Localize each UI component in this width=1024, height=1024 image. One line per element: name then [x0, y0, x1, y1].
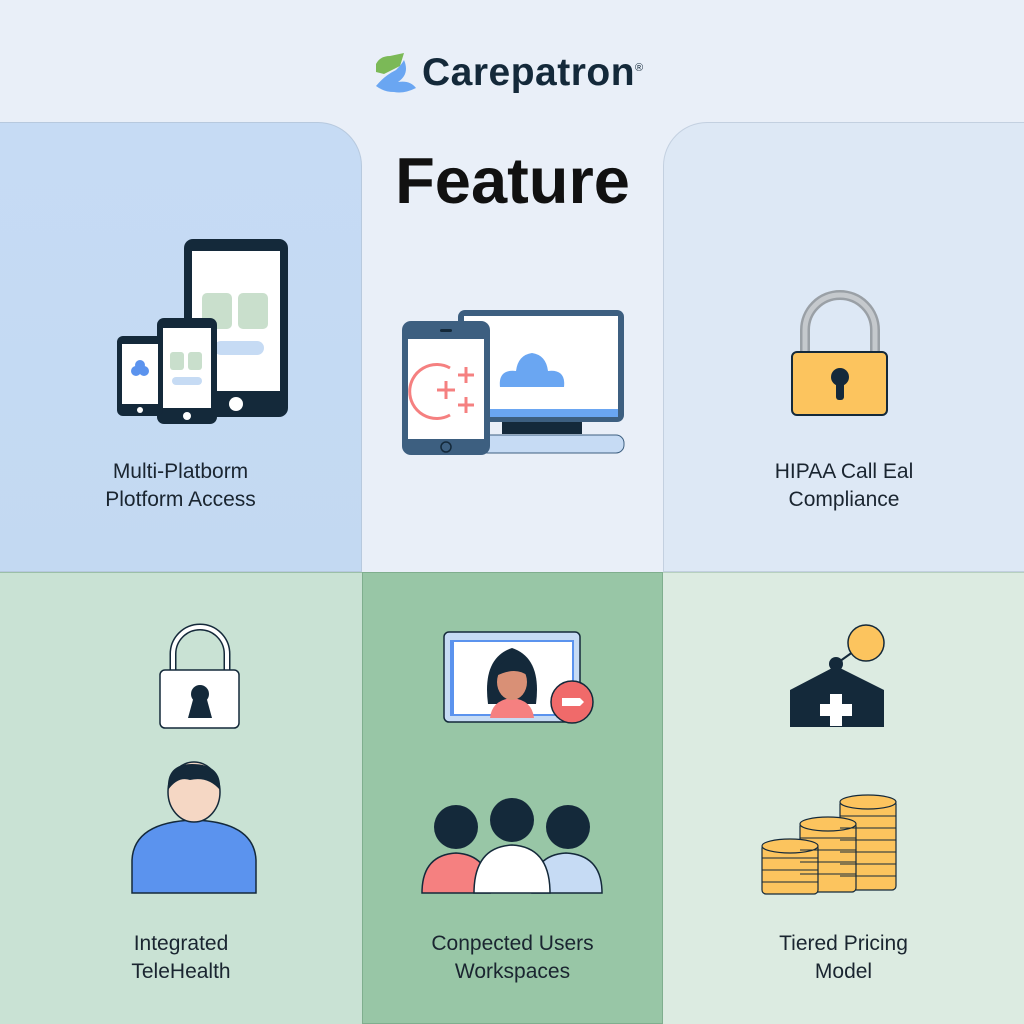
label: HIPAA: HIPAA Call Eal — [775, 460, 913, 483]
panel: top middle — [362, 122, 663, 572]
panel: pricing — [663, 572, 1024, 1024]
icon: tablet and monitor — [402, 310, 624, 455]
icon: padlock gold — [791, 290, 888, 416]
label: pricing: Model — [815, 960, 872, 983]
label: telehealth: TeleHealth — [131, 960, 231, 983]
icon: video call — [443, 631, 594, 724]
label: HIPAA — [775, 460, 913, 511]
title: Feature — [395, 144, 630, 217]
icon: person — [131, 761, 257, 894]
label: telehealth: Integrated — [134, 932, 228, 955]
label: multi-platform: Multi-Platborm — [113, 460, 248, 483]
icon: medical tag — [790, 624, 885, 727]
icon: devices — [117, 239, 288, 424]
label: users — [431, 932, 594, 983]
panel: telehealth — [0, 572, 362, 1024]
panel: multi-platform — [0, 122, 362, 572]
label: telehealth — [131, 932, 231, 983]
panel: users — [362, 572, 663, 1024]
label: pricing: Tiered Pricing — [779, 932, 908, 955]
icon: coin stacks — [761, 794, 897, 895]
label: HIPAA: Compliance — [789, 488, 899, 511]
label: users: Conрected Users — [431, 932, 594, 955]
icon: users — [421, 798, 603, 894]
panel: HIPAA — [663, 122, 1024, 572]
icon: white padlock — [159, 624, 240, 729]
label: users: Workspaces — [455, 960, 570, 983]
logo: Carepatron® — [422, 51, 644, 94]
label: multi-platform — [105, 460, 256, 511]
label: multi-platform: Plotform Access — [105, 488, 256, 511]
label: pricing — [779, 932, 908, 983]
